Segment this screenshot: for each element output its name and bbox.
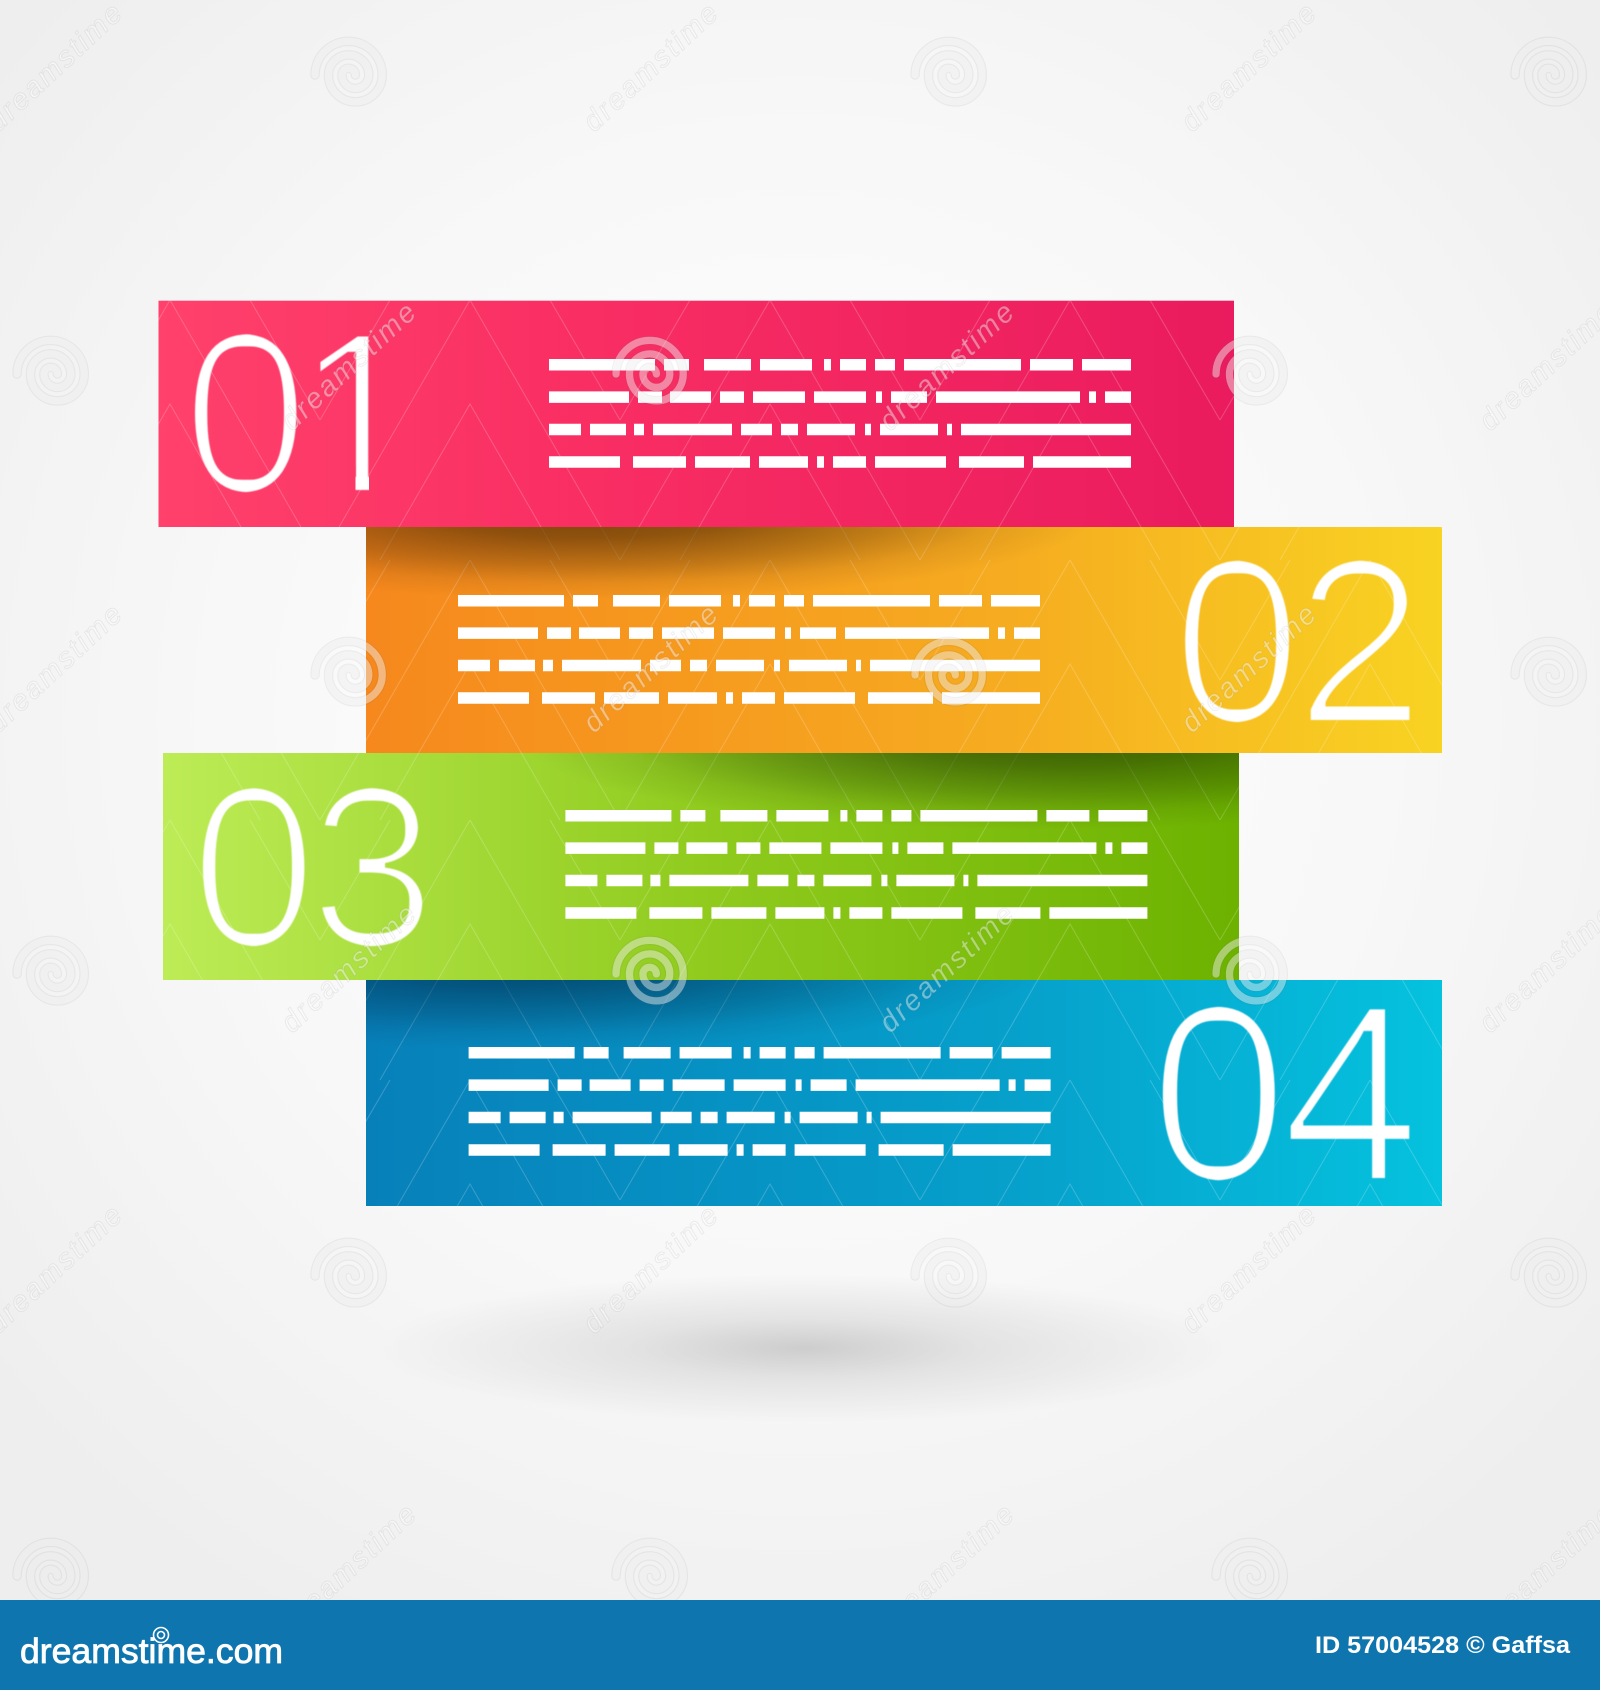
text lines 04 [469, 1047, 1051, 1156]
panel: ribbon 04 [366, 980, 1442, 1206]
watermark text: dreamstime [577, 1199, 725, 1340]
number 02: 02 [1172, 510, 1425, 772]
text lines 02 [458, 595, 1040, 704]
footer bar [0, 1600, 1600, 1690]
ribbon 03 cast shadow [581, 753, 1239, 820]
watermark text: dreamstime [275, 898, 423, 1039]
watermark text: dreamstime [1175, 1199, 1323, 1340]
watermark text: dreamstime [873, 296, 1021, 437]
panel: ribbon 03 [163, 753, 1239, 980]
watermark text: dreamstime [873, 898, 1021, 1039]
watermark text: dreamstime [577, 598, 725, 739]
footer credit: ID 57004528 © Gaffsa [1315, 1632, 1571, 1659]
text lines 01 [549, 359, 1131, 468]
number 04: 04 [1149, 954, 1421, 1234]
panel: ribbon 01 [158, 300, 1234, 527]
ribbon 04 cast shadow [366, 980, 978, 1040]
panel: ribbon 02 [366, 527, 1442, 753]
footer logo text: dreamstime.com [20, 1632, 283, 1671]
watermark text: dreamstime [1175, 0, 1323, 138]
watermark text: dreamstime [577, 0, 725, 138]
watermark text: dreamstime [275, 296, 423, 437]
text lines 03 [565, 810, 1147, 919]
icon: footer spiral [154, 1628, 168, 1642]
number 01: 01 [182, 285, 422, 541]
watermark text: dreamstime [1175, 598, 1323, 739]
watermark text: dreamstime [873, 1498, 1021, 1639]
watermark text: dreamstime [275, 1498, 423, 1639]
number 03: 03 [190, 739, 436, 995]
ground shadow [373, 1273, 1233, 1423]
ribbon 02 cast shadow [366, 527, 1046, 592]
